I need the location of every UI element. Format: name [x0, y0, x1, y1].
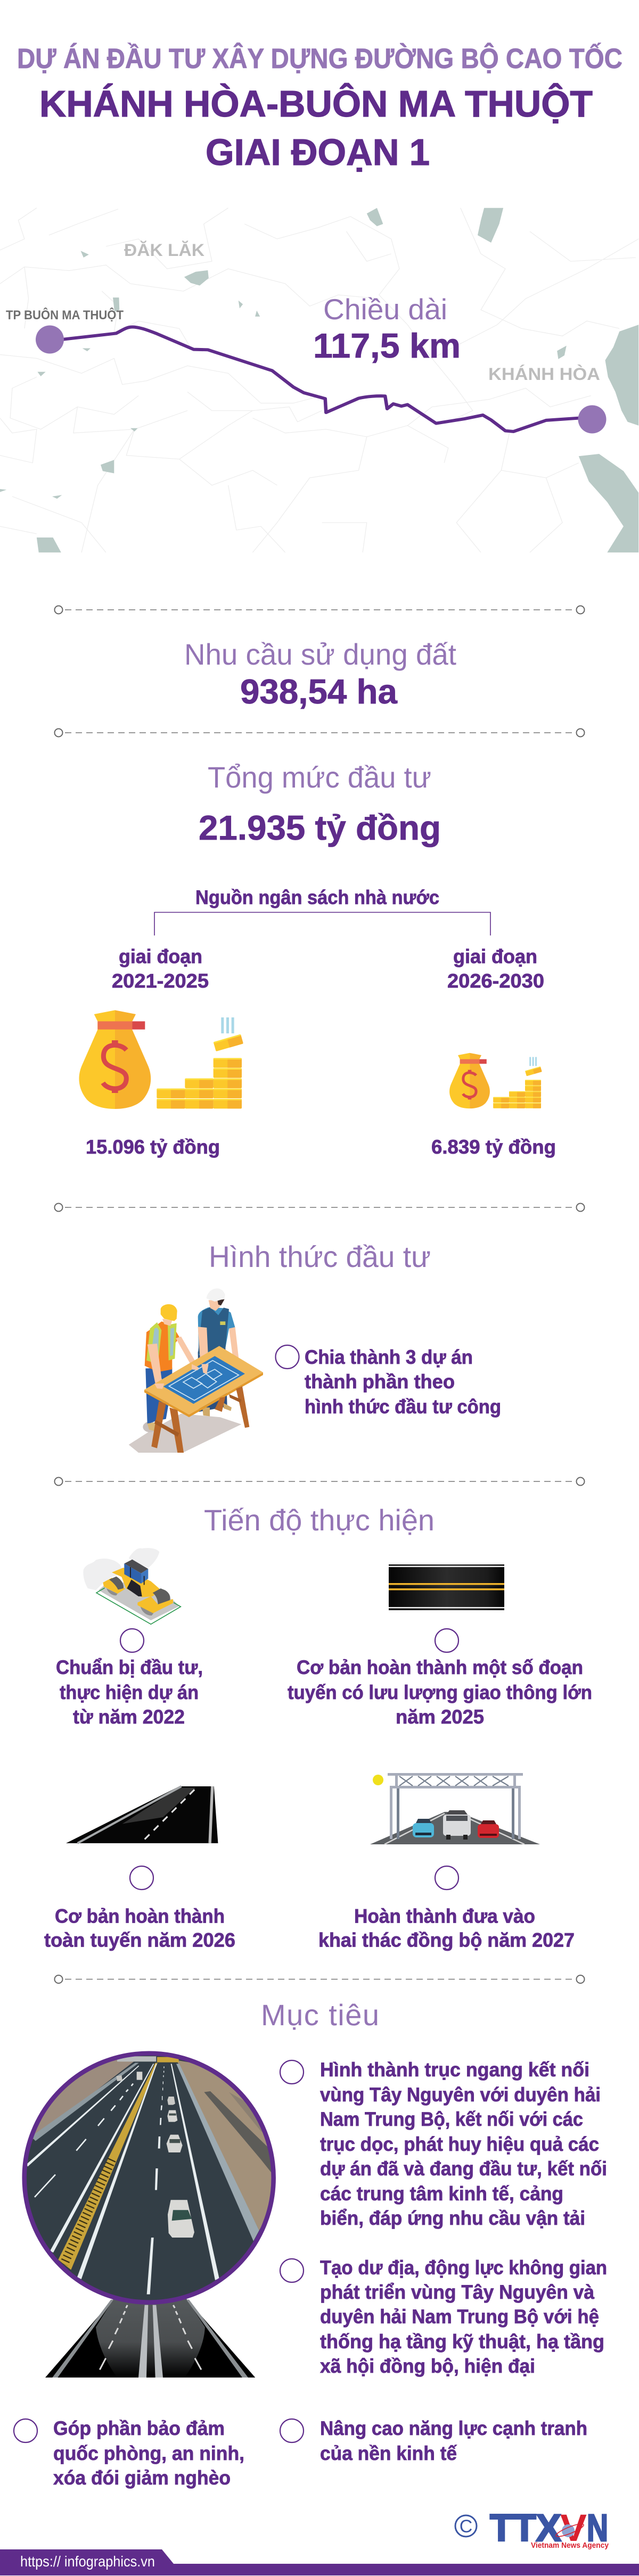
period 2026-2030: giai đoạn — [453, 946, 537, 967]
photo ring — [24, 2053, 274, 2302]
objective 2 — [280, 2257, 607, 2377]
step 3: full route — [44, 1786, 235, 1951]
objective 2: xã hội đồng bộ, hiện đại — [320, 2355, 535, 2377]
objective 1 — [280, 2059, 607, 2229]
bullet — [435, 1866, 458, 1890]
caption — [44, 1905, 235, 1951]
objective 2: Tạo dư địa, động lực không gian — [320, 2257, 607, 2279]
objective 1: Nam Trung Bộ, kết nối với các — [320, 2108, 583, 2130]
title: KHÁNH HÒA-BUÔN MA THUỘT — [39, 82, 593, 125]
description: thành phần theo — [305, 1371, 455, 1393]
copyright mark — [455, 2515, 477, 2537]
objective 1: các trung tâm kinh tế, cảng — [320, 2183, 563, 2205]
icon: large money bag and coins — [79, 1010, 243, 1109]
caption: Hoàn thành đưa vào — [354, 1905, 535, 1927]
bullet — [120, 1629, 144, 1652]
copyright mark: C — [460, 2516, 472, 2537]
period 2026-2030 — [447, 946, 544, 992]
land use requirement — [184, 637, 456, 711]
illustration: engineers at a table — [129, 1288, 263, 1453]
panel: investment form — [129, 1240, 501, 1453]
map base: provinces, rivers and lakes — [0, 208, 638, 552]
caption: thực hiện dự án — [60, 1682, 199, 1703]
objective 1: trục dọc, phát huy hiệu quả các — [320, 2133, 599, 2155]
objective 1: Hình thành trục ngang kết nối — [320, 2059, 589, 2081]
photo: expressway — [27, 2056, 272, 2300]
panel: route map — [0, 208, 638, 552]
objective 4: Nâng cao năng lực cạnh tranh — [320, 2417, 587, 2439]
label: Dak Lak: ĐĂK LĂK — [124, 241, 204, 260]
title — [17, 42, 622, 173]
length label: 117,5 km — [313, 326, 461, 365]
total investment: 21.935 tỷ đồng — [199, 808, 441, 847]
amount 2021-2025: 15.096 tỷ đồng — [86, 1136, 220, 1158]
period 2021-2025: 2021-2025 — [112, 970, 209, 992]
caption: toàn tuyến năm 2026 — [44, 1929, 235, 1951]
step 2: main sections — [288, 1564, 592, 1728]
objective 1: biển, đáp ứng nhu cầu vận tải — [320, 2207, 585, 2229]
period 2021-2025: giai đoạn — [119, 946, 202, 967]
total investment — [199, 760, 441, 847]
objective 3: Góp phần bảo đảm — [53, 2417, 225, 2439]
heading: Tiến độ thực hiện — [204, 1503, 435, 1537]
route start marker — [36, 326, 64, 353]
label: Buon Ma Thuot city: TP BUÔN MA THUỘT — [6, 308, 124, 322]
amount 2026-2030: 6.839 tỷ đồng — [431, 1136, 556, 1158]
bullet — [130, 1866, 153, 1890]
caption: Cơ bản hoàn thành — [55, 1905, 225, 1927]
caption — [318, 1905, 575, 1951]
description: Chia thành 3 dự án — [305, 1346, 473, 1368]
objective 1: vùng Tây Nguyên với duyên hải — [320, 2084, 601, 2106]
icon: highway gantry with cars — [370, 1773, 540, 1844]
logo: TTXVN: TTX — [490, 2507, 561, 2549]
land use requirement: 938,54 ha — [240, 672, 398, 711]
footer bar: https:// infographics.vn — [20, 2553, 155, 2570]
heading: Hình thức đầu tư — [209, 1240, 431, 1273]
objective 2: phát triển vùng Tây Nguyên và — [320, 2281, 594, 2303]
panel: objectives — [14, 1998, 607, 2489]
objective 4: của nền kinh tế — [320, 2442, 457, 2464]
caption: tuyến có lưu lượng giao thông lớn — [288, 1682, 592, 1703]
objective 3 — [14, 2417, 244, 2489]
caption — [56, 1656, 203, 1728]
bullet — [276, 1345, 299, 1369]
panel: implementation schedule — [44, 1503, 592, 1951]
step 4: synchronized operation — [318, 1773, 575, 1951]
caption: Cơ bản hoàn thành một số đoạn — [297, 1656, 583, 1678]
label: Khanh Hoa: KHÁNH HÒA — [488, 365, 600, 384]
icon: straight asphalt road — [389, 1564, 504, 1610]
route line — [63, 327, 579, 432]
description — [305, 1346, 501, 1418]
footer bar — [0, 2549, 639, 2575]
length label: Chiều dài — [323, 293, 447, 326]
objective 3: quốc phòng, an ninh, — [53, 2442, 244, 2464]
logo: TTXVN — [455, 2507, 609, 2550]
caption — [288, 1656, 592, 1728]
objective 1: dự án đã và đang đầu tư, kết nối — [320, 2158, 607, 2180]
step 1: preparation — [56, 1548, 203, 1728]
icon: small money bag and coins — [449, 1053, 542, 1108]
title: GIAI ĐOẠN 1 — [206, 131, 430, 173]
logo: TTXVN: Vietnam News Agency — [531, 2541, 609, 2550]
description: hình thức đầu tư công — [305, 1396, 501, 1418]
logo: TTXVN: V — [560, 2507, 587, 2549]
caption: từ năm 2022 — [73, 1706, 185, 1728]
caption: khai thác đồng bộ năm 2027 — [318, 1929, 575, 1951]
panel: state budget sources — [79, 887, 556, 1158]
budget heading: Nguồn ngân sách nhà nước — [195, 887, 439, 908]
caption: năm 2025 — [396, 1706, 484, 1728]
objective 2: duyên hải Nam Trung Bộ với hệ — [320, 2306, 599, 2327]
period 2026-2030: 2026-2030 — [447, 970, 544, 992]
objective 4 — [280, 2417, 587, 2464]
icon: road in perspective — [66, 1786, 218, 1843]
heading: Mục tiêu — [261, 1998, 379, 2032]
logo: TTXVN: N — [587, 2507, 608, 2549]
land use requirement: Nhu cầu sử dụng đất — [184, 637, 456, 671]
objective 3: xóa đói giảm nghèo — [53, 2467, 231, 2489]
bracket — [154, 912, 490, 935]
route end marker — [578, 405, 606, 433]
bullet — [435, 1629, 458, 1652]
caption: Chuẩn bị đầu tư, — [56, 1656, 203, 1678]
length label — [313, 293, 461, 365]
icon: road roller — [83, 1548, 181, 1624]
period 2021-2025 — [112, 946, 209, 992]
road below photo — [45, 2299, 255, 2378]
objective 2: thống hạ tầng kỹ thuật, hạ tầng — [320, 2331, 604, 2353]
total investment: Tổng mức đầu tư — [208, 760, 431, 794]
